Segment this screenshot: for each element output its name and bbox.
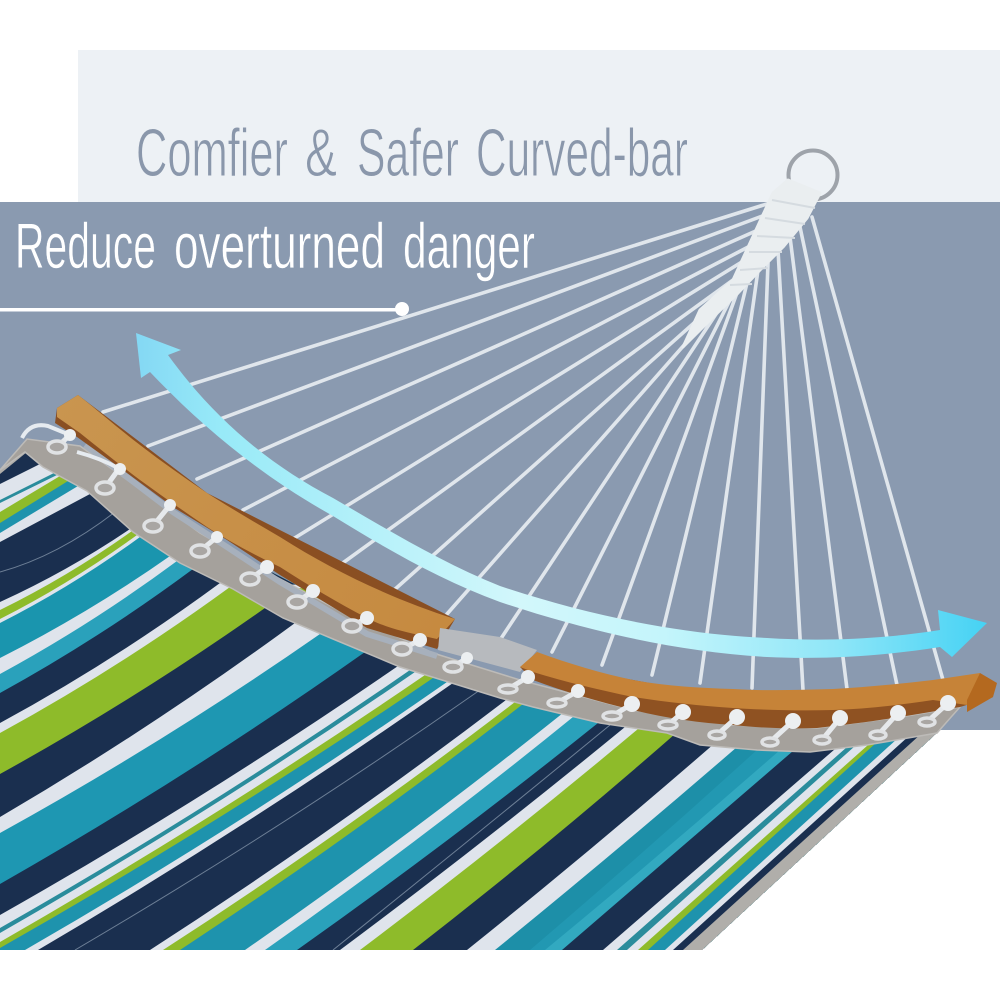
panel: slate background bbox=[0, 202, 1000, 730]
heading: Comfier & Safer Curved-bar: Curved-bar bbox=[476, 115, 688, 191]
panel: light header band bbox=[78, 50, 1000, 202]
bamboo spreader bar: left section underside bbox=[55, 395, 455, 649]
metal connector bbox=[438, 628, 537, 672]
rope eyelets and knots bbox=[22, 425, 956, 746]
icon: metal ring bbox=[788, 150, 838, 200]
heading: Comfier & Safer Curved-bar: Comfier bbox=[136, 115, 288, 191]
subheading: Reduce overturned danger: danger bbox=[403, 210, 535, 282]
hammock suspension ropes fan bbox=[103, 203, 943, 690]
metal gap strip behind bar bbox=[85, 445, 437, 656]
bamboo spreader bar: right section top bbox=[520, 652, 980, 710]
bamboo spreader bar: end cap bbox=[967, 673, 997, 712]
striped hammock fabric bbox=[0, 453, 936, 950]
double-headed motion arrow bbox=[136, 333, 987, 658]
subheading: Reduce overturned danger: overturned bbox=[174, 210, 385, 282]
heading: Comfier & Safer Curved-bar: & bbox=[305, 115, 337, 191]
fabric header band bbox=[0, 439, 960, 752]
subheading: Reduce overturned danger: Reduce bbox=[15, 210, 156, 282]
callout line with dot bbox=[0, 302, 409, 316]
heading: Comfier & Safer Curved-bar: Safer bbox=[357, 115, 459, 191]
bamboo spreader bar: left section top bbox=[57, 395, 455, 639]
rope knot wrap bbox=[683, 180, 820, 347]
bamboo spreader bar: right section underside bbox=[520, 662, 993, 728]
